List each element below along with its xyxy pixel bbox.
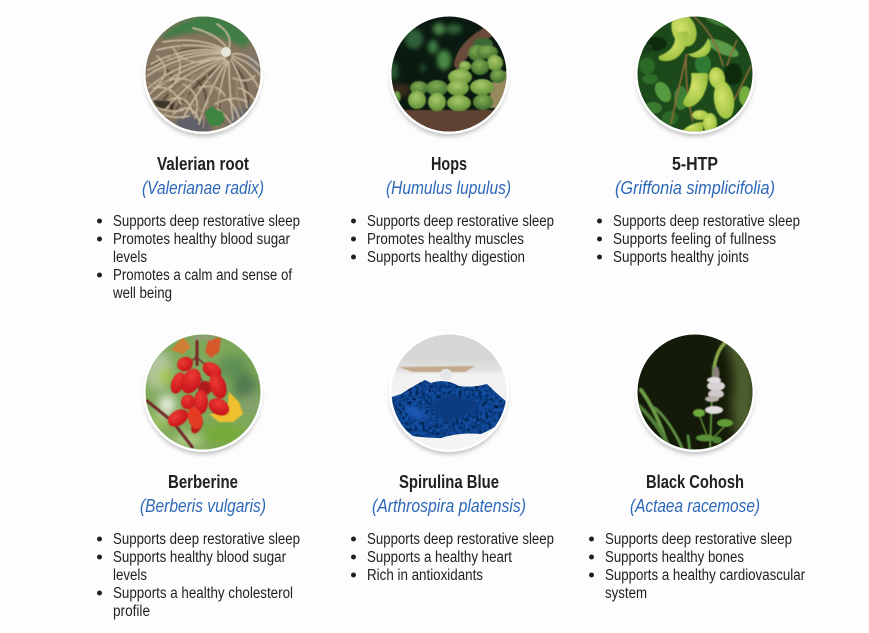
latin name: Humulus lupulus: (Humulus lupulus) [386, 178, 511, 198]
benefits list: Supports deep restorative sleep [113, 531, 300, 548]
latin name: Actaea racemose: (Actaea racemose) [630, 496, 760, 516]
benefits list: Supports deep restorative sleep [605, 531, 792, 548]
benefits list: Supports healthy digestion [367, 249, 525, 266]
icon: griffonia pods photo [635, 10, 755, 136]
icon: black cohosh photo [635, 332, 755, 454]
benefits list: Supports feeling of fullness [613, 231, 776, 248]
benefits list [351, 531, 554, 584]
benefits list: Supports a healthy cardiovascular [605, 567, 805, 584]
heading: Berberine: Berberine [168, 472, 238, 492]
benefits list: Promotes a calm and sense of [113, 267, 293, 284]
latin name: Griffonia simplicifolia: (Griffonia simplicifolia) [615, 178, 775, 198]
icon: barberry photo [143, 332, 263, 454]
heading: Black Cohosh: Black Cohosh [646, 472, 744, 492]
heading: Spirulina Blue: Spirulina Blue [399, 472, 499, 492]
latin name: Berberis vulgaris: (Berberis vulgaris) [140, 496, 266, 516]
benefits list: Supports deep restorative sleep [613, 213, 800, 230]
benefits list: Supports deep restorative sleep [367, 531, 554, 548]
icon: spirulina powder photo [389, 332, 509, 454]
benefits list: Supports a healthy heart [367, 549, 513, 566]
heading: 5-HTP: 5-HTP [672, 154, 718, 174]
card: Berberine [97, 332, 300, 620]
card: Hops [351, 14, 554, 266]
benefits list: Supports healthy joints [613, 249, 749, 266]
latin name: Valerianae radix: (Valerianae radix) [142, 178, 264, 198]
benefits list: levels [113, 249, 147, 266]
benefits list: Supports deep restorative sleep [113, 213, 300, 230]
benefits list: system [605, 585, 647, 602]
benefits list: Supports healthy bones [605, 549, 744, 566]
benefits list [351, 213, 554, 266]
benefits list: Supports a healthy cholesterol [113, 585, 293, 602]
heading: Hops: Hops [431, 154, 467, 174]
benefits list: profile [113, 603, 150, 620]
benefits list: levels [113, 567, 147, 584]
benefits list: Rich in antioxidants [367, 567, 483, 584]
benefits list [97, 213, 300, 302]
card: 5-HTP [597, 10, 800, 266]
card: Valerian root [97, 12, 300, 302]
heading: Valerian root: Valerian root [157, 154, 249, 174]
benefits list: Supports deep restorative sleep [367, 213, 554, 230]
icon: hops photo [389, 14, 509, 136]
benefits list: Promotes healthy muscles [367, 231, 524, 248]
benefits list [97, 531, 300, 620]
benefits list [589, 531, 805, 602]
benefits list: Supports healthy blood sugar [113, 549, 286, 566]
card: Black Cohosh [589, 332, 805, 602]
benefits list [597, 213, 800, 266]
icon: valerian root photo [143, 12, 263, 136]
benefits list: Promotes healthy blood sugar [113, 231, 290, 248]
latin name: Arthrospira platensis: (Arthrospira platensis) [372, 496, 526, 516]
benefits list: well being [112, 285, 172, 302]
card: Spirulina Blue [351, 332, 554, 584]
